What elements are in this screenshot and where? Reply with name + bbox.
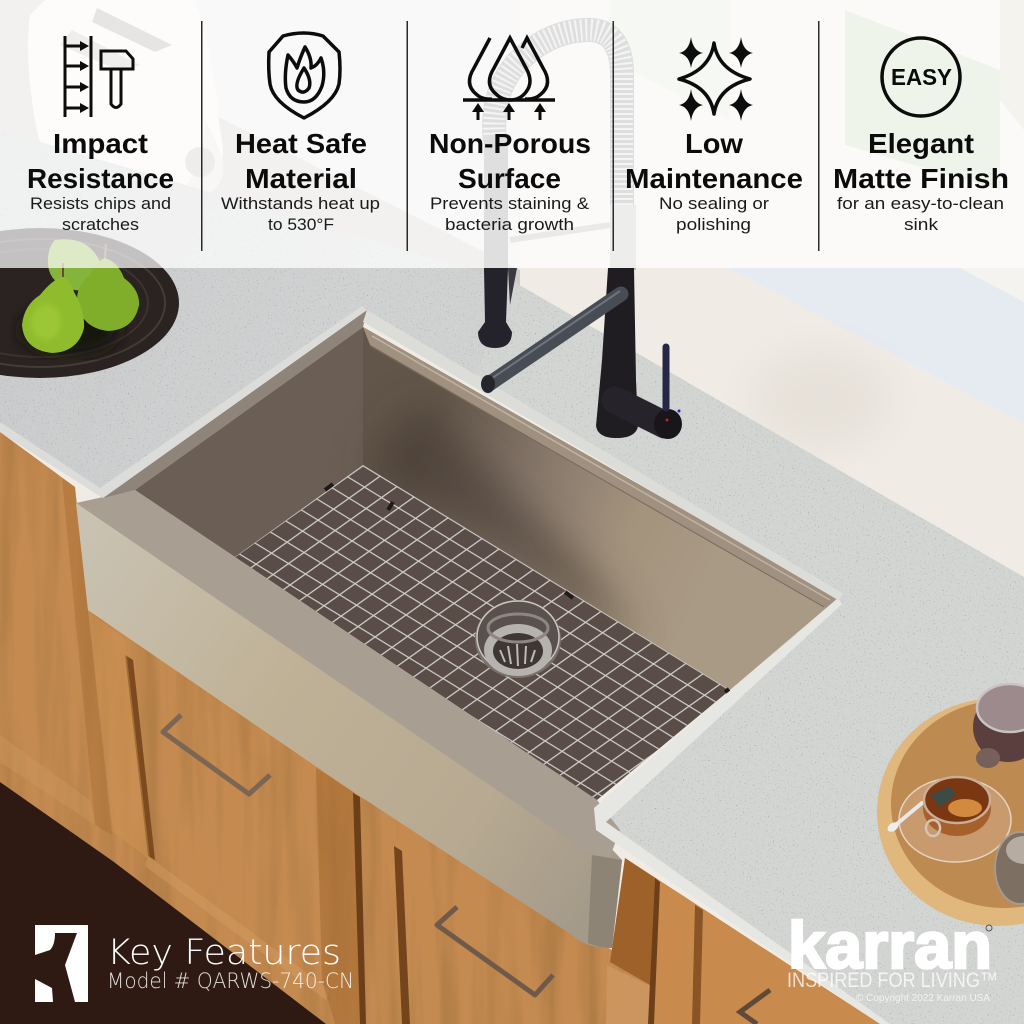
door panel groove <box>125 655 155 860</box>
connector <box>510 225 610 240</box>
description line 2: to 530°F <box>268 215 334 234</box>
cup handle <box>926 820 940 836</box>
icon: easy badge <box>882 38 960 116</box>
cup <box>923 780 991 836</box>
apron right end <box>588 855 622 948</box>
description line 2: polishing <box>676 215 751 234</box>
description line 2: sink <box>904 215 939 234</box>
panel: heat safe material <box>221 33 380 234</box>
rack clips <box>325 484 729 692</box>
copyright: © Copyright 2022 Karran USA <box>856 993 990 1004</box>
left cabinet shading <box>62 478 112 835</box>
karran logo: karran <box>788 908 992 982</box>
heading: Low <box>685 128 743 159</box>
saucer <box>899 778 1011 862</box>
handle cylinder <box>615 400 665 425</box>
handle 3 <box>740 990 770 1024</box>
tray <box>877 684 1024 926</box>
description line 2: scratches <box>62 215 139 234</box>
window glass <box>845 10 1000 190</box>
heading line 2: Matte Finish <box>833 163 1009 194</box>
panel: non-porous surface <box>429 38 591 234</box>
heading line 2: Resistance <box>27 163 174 194</box>
panel: impact resistance <box>27 36 174 234</box>
wall shadow <box>363 400 640 650</box>
description: Resists chips and <box>30 194 171 213</box>
heading line 2: Maintenance <box>625 163 803 194</box>
faucet <box>478 30 682 439</box>
panel: low maintenance <box>625 37 803 234</box>
description line 2: bacteria growth <box>445 215 574 234</box>
dark floor <box>0 782 326 1024</box>
model number: Model # QARWS-740-CN <box>107 969 354 993</box>
icon: shield with flame <box>269 33 340 118</box>
description: Withstands heat up <box>221 194 380 213</box>
icon: drops with arrows <box>463 38 555 120</box>
description: Prevents staining & <box>430 194 590 213</box>
lever <box>662 347 670 408</box>
indicator dots <box>666 418 668 422</box>
counter rim back edge <box>363 310 844 600</box>
heading: Heat Safe <box>235 128 367 159</box>
spray head <box>478 268 512 348</box>
teapot <box>973 692 1024 762</box>
handle 1 <box>163 715 270 794</box>
toaster <box>28 0 223 205</box>
description: for an easy-to-clean <box>837 194 1004 213</box>
handle 2 <box>437 907 553 995</box>
left wall <box>135 327 363 557</box>
body <box>596 268 638 438</box>
heading line 2: Surface <box>458 163 561 194</box>
counter right notch edge <box>594 598 890 1024</box>
jar <box>995 832 1024 904</box>
panel: elegant matte finish <box>833 38 1009 234</box>
heading: Non-Porous <box>429 128 591 159</box>
left wall shade <box>0 0 520 290</box>
marble cream patch <box>750 350 890 450</box>
cabinets wood <box>0 430 880 1024</box>
left rim strip <box>103 310 367 498</box>
arm <box>489 294 621 384</box>
back wall <box>363 327 838 690</box>
window sill blue <box>728 268 1024 423</box>
translucent white header band <box>0 0 1024 268</box>
description: No sealing or <box>659 194 769 213</box>
rim molding <box>363 327 838 608</box>
sink floor <box>235 465 730 800</box>
farmhouse sink <box>76 310 838 948</box>
lower sleeve <box>610 205 636 270</box>
second door <box>394 846 410 1024</box>
plate <box>0 228 179 378</box>
heading line 2: Material <box>245 163 357 194</box>
pears <box>22 239 139 353</box>
sink top rim <box>76 490 620 857</box>
brand mark <box>35 925 88 1002</box>
title: key features: Key Features <box>107 933 341 973</box>
wire grid rack <box>235 465 730 800</box>
icon: easy badge: EASY <box>891 64 952 90</box>
spray head upper <box>484 135 508 270</box>
apron front <box>76 503 622 948</box>
spoon <box>892 803 922 828</box>
icon: wall and hammer <box>65 36 133 117</box>
window frame <box>960 268 1024 302</box>
heading: Elegant <box>868 128 974 159</box>
drain <box>475 600 561 678</box>
counter rim left edge <box>0 306 367 498</box>
spring hose <box>494 30 622 268</box>
icon: sparkles <box>679 37 753 121</box>
heading: Impact <box>53 128 148 159</box>
